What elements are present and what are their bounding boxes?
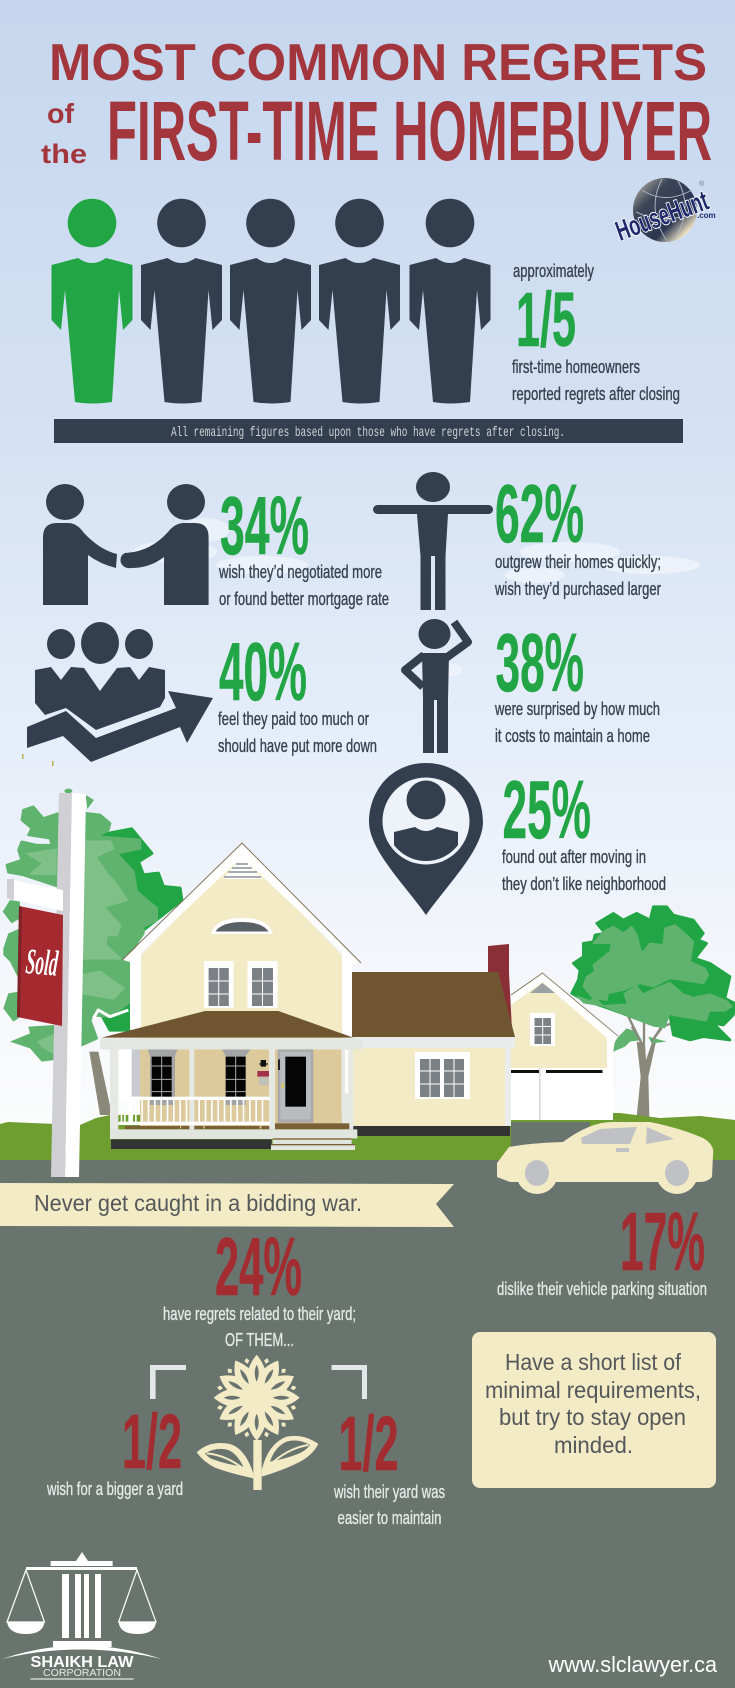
porch window left	[148, 1049, 177, 1105]
stat: 1/2 easier yard: easier to maintain	[338, 1508, 442, 1528]
stat: 62%: 62%	[495, 467, 584, 560]
petals	[214, 1355, 300, 1441]
driveway	[511, 1122, 590, 1161]
specks	[22, 754, 54, 766]
ribbon: bidding war tip	[0, 1183, 454, 1227]
stat: 40%: should have put more down	[218, 736, 377, 756]
stat: 25%: found out after moving in	[502, 847, 646, 867]
icon: person arms wide	[373, 472, 493, 610]
upper windows	[204, 961, 278, 1008]
porch columns	[110, 1038, 353, 1130]
stat: 1/2 easier yard	[333, 1401, 445, 1528]
people row: 1 in 5	[52, 199, 490, 404]
stem and leaves	[197, 1436, 318, 1490]
stat: 40%	[218, 625, 377, 756]
stat: 24% yard: 24%	[215, 1220, 302, 1313]
logo: Shaikh Law Corporation: SHAIKH LAW	[30, 1654, 134, 1671]
icon: map pin	[369, 763, 483, 915]
chimney	[488, 944, 512, 1030]
person: dark 4	[319, 199, 400, 404]
gable vent	[223, 856, 262, 879]
car	[497, 1122, 713, 1194]
person: dark 5	[410, 199, 490, 404]
garage	[511, 973, 618, 1120]
lamp and flower box	[257, 1059, 280, 1085]
stat: 40%: 40%	[219, 625, 307, 718]
sign post: Sold	[24, 942, 60, 985]
stat: 24% yard: have regrets related to their yard;	[163, 1304, 356, 1324]
sky background	[0, 0, 735, 1160]
stat: 34%: wish they’d negotiated more	[218, 562, 382, 582]
stat: 1/2 bigger yard	[46, 1399, 183, 1499]
ground: grass	[0, 1113, 735, 1161]
person: green	[52, 199, 132, 404]
clouds	[133, 518, 700, 677]
right tree	[572, 907, 735, 1117]
stat: 1/2 bigger yard: wish for a bigger a yard	[46, 1479, 183, 1499]
ribbon: bidding war tip: Never get caught in a bidding war.	[34, 1190, 362, 1216]
stat: 1/2 easier yard: wish their yard was	[333, 1482, 445, 1502]
website url: www.slclawyer.ca	[548, 1652, 718, 1677]
person: dark 2	[141, 199, 222, 404]
foundation	[111, 1139, 272, 1149]
petal slits	[224, 1365, 290, 1431]
title: the	[41, 139, 87, 169]
wing window	[415, 1052, 470, 1099]
steps	[271, 1138, 355, 1150]
stat: 1/2 bigger yard: 1/2	[122, 1399, 182, 1485]
stat: 25%: they don’t like neighborhood	[502, 874, 666, 894]
road	[0, 1160, 735, 1688]
tip box: short list: minimal requirements,	[485, 1377, 701, 1403]
porch beam	[100, 1038, 363, 1049]
wing wall	[350, 1048, 510, 1126]
logo: Shaikh Law Corporation: CORPORATION	[43, 1668, 121, 1679]
stat: 1/5: first-time homeowners	[512, 357, 640, 377]
sign post	[7, 793, 86, 1177]
brown floor strips	[125, 1123, 349, 1129]
stat: 40%: feel they paid too much or	[218, 709, 369, 729]
main roof trim	[123, 843, 361, 1033]
logo: HouseHunt: .com	[697, 211, 716, 220]
sign: sold	[17, 906, 63, 1026]
stat: 1/5	[512, 261, 680, 404]
icon: person scratching head	[405, 619, 468, 753]
stat: 34%	[218, 479, 389, 609]
stat: 25%	[502, 763, 666, 894]
stat: 17% parking	[497, 1195, 707, 1299]
stat: 24% yard: OF THEM...	[225, 1330, 294, 1350]
stat: 38%: 38%	[496, 616, 584, 709]
stat: 62%: outgrew their homes quickly;	[495, 552, 661, 572]
icon: flower	[197, 1355, 318, 1490]
porch window right	[222, 1049, 251, 1105]
tip box: short list	[472, 1332, 716, 1488]
brackets	[150, 1365, 367, 1399]
banner: figures note	[54, 419, 683, 443]
title: of	[47, 98, 75, 129]
stat: 1/5: 1/5	[516, 277, 576, 363]
stat: 38%: were surprised by how much	[494, 699, 660, 719]
title: MOST COMMON REGRETS	[49, 34, 707, 92]
porch back wall	[140, 1049, 342, 1128]
logo: HouseHunt: ®	[699, 180, 705, 188]
front porch	[100, 1011, 363, 1150]
wing roof	[352, 972, 515, 1038]
logo: Shaikh Law Corporation	[2, 1552, 162, 1680]
stat: 1/5: approximately	[513, 261, 594, 281]
door	[278, 1049, 313, 1123]
person: dark 3	[230, 199, 311, 404]
icon: group with arrow	[27, 622, 213, 762]
left tree	[3, 789, 182, 1115]
stat: 34%: or found better mortgage rate	[219, 589, 389, 609]
porch floor	[110, 1129, 357, 1139]
tip box: short list: but try to stay open	[499, 1404, 686, 1430]
arched window	[211, 918, 273, 934]
icon: handshake	[43, 484, 209, 605]
main wall	[141, 852, 342, 1040]
stat: 38%: it costs to maintain a home	[495, 726, 650, 746]
stat: 24% yard	[163, 1220, 356, 1350]
stat: 62%: wish they’d purchased larger	[494, 579, 661, 599]
house	[100, 843, 618, 1150]
stat: 34%: 34%	[220, 479, 309, 572]
title	[41, 34, 712, 178]
tip box: short list: Have a short list of	[505, 1349, 682, 1375]
stat: 25%: 25%	[502, 763, 591, 856]
porch roof	[102, 1011, 353, 1038]
sign arm	[7, 879, 63, 911]
stat: 1/2 easier yard: 1/2	[338, 1401, 398, 1487]
tip box: short list: minded.	[554, 1432, 633, 1458]
railing	[118, 1097, 270, 1125]
